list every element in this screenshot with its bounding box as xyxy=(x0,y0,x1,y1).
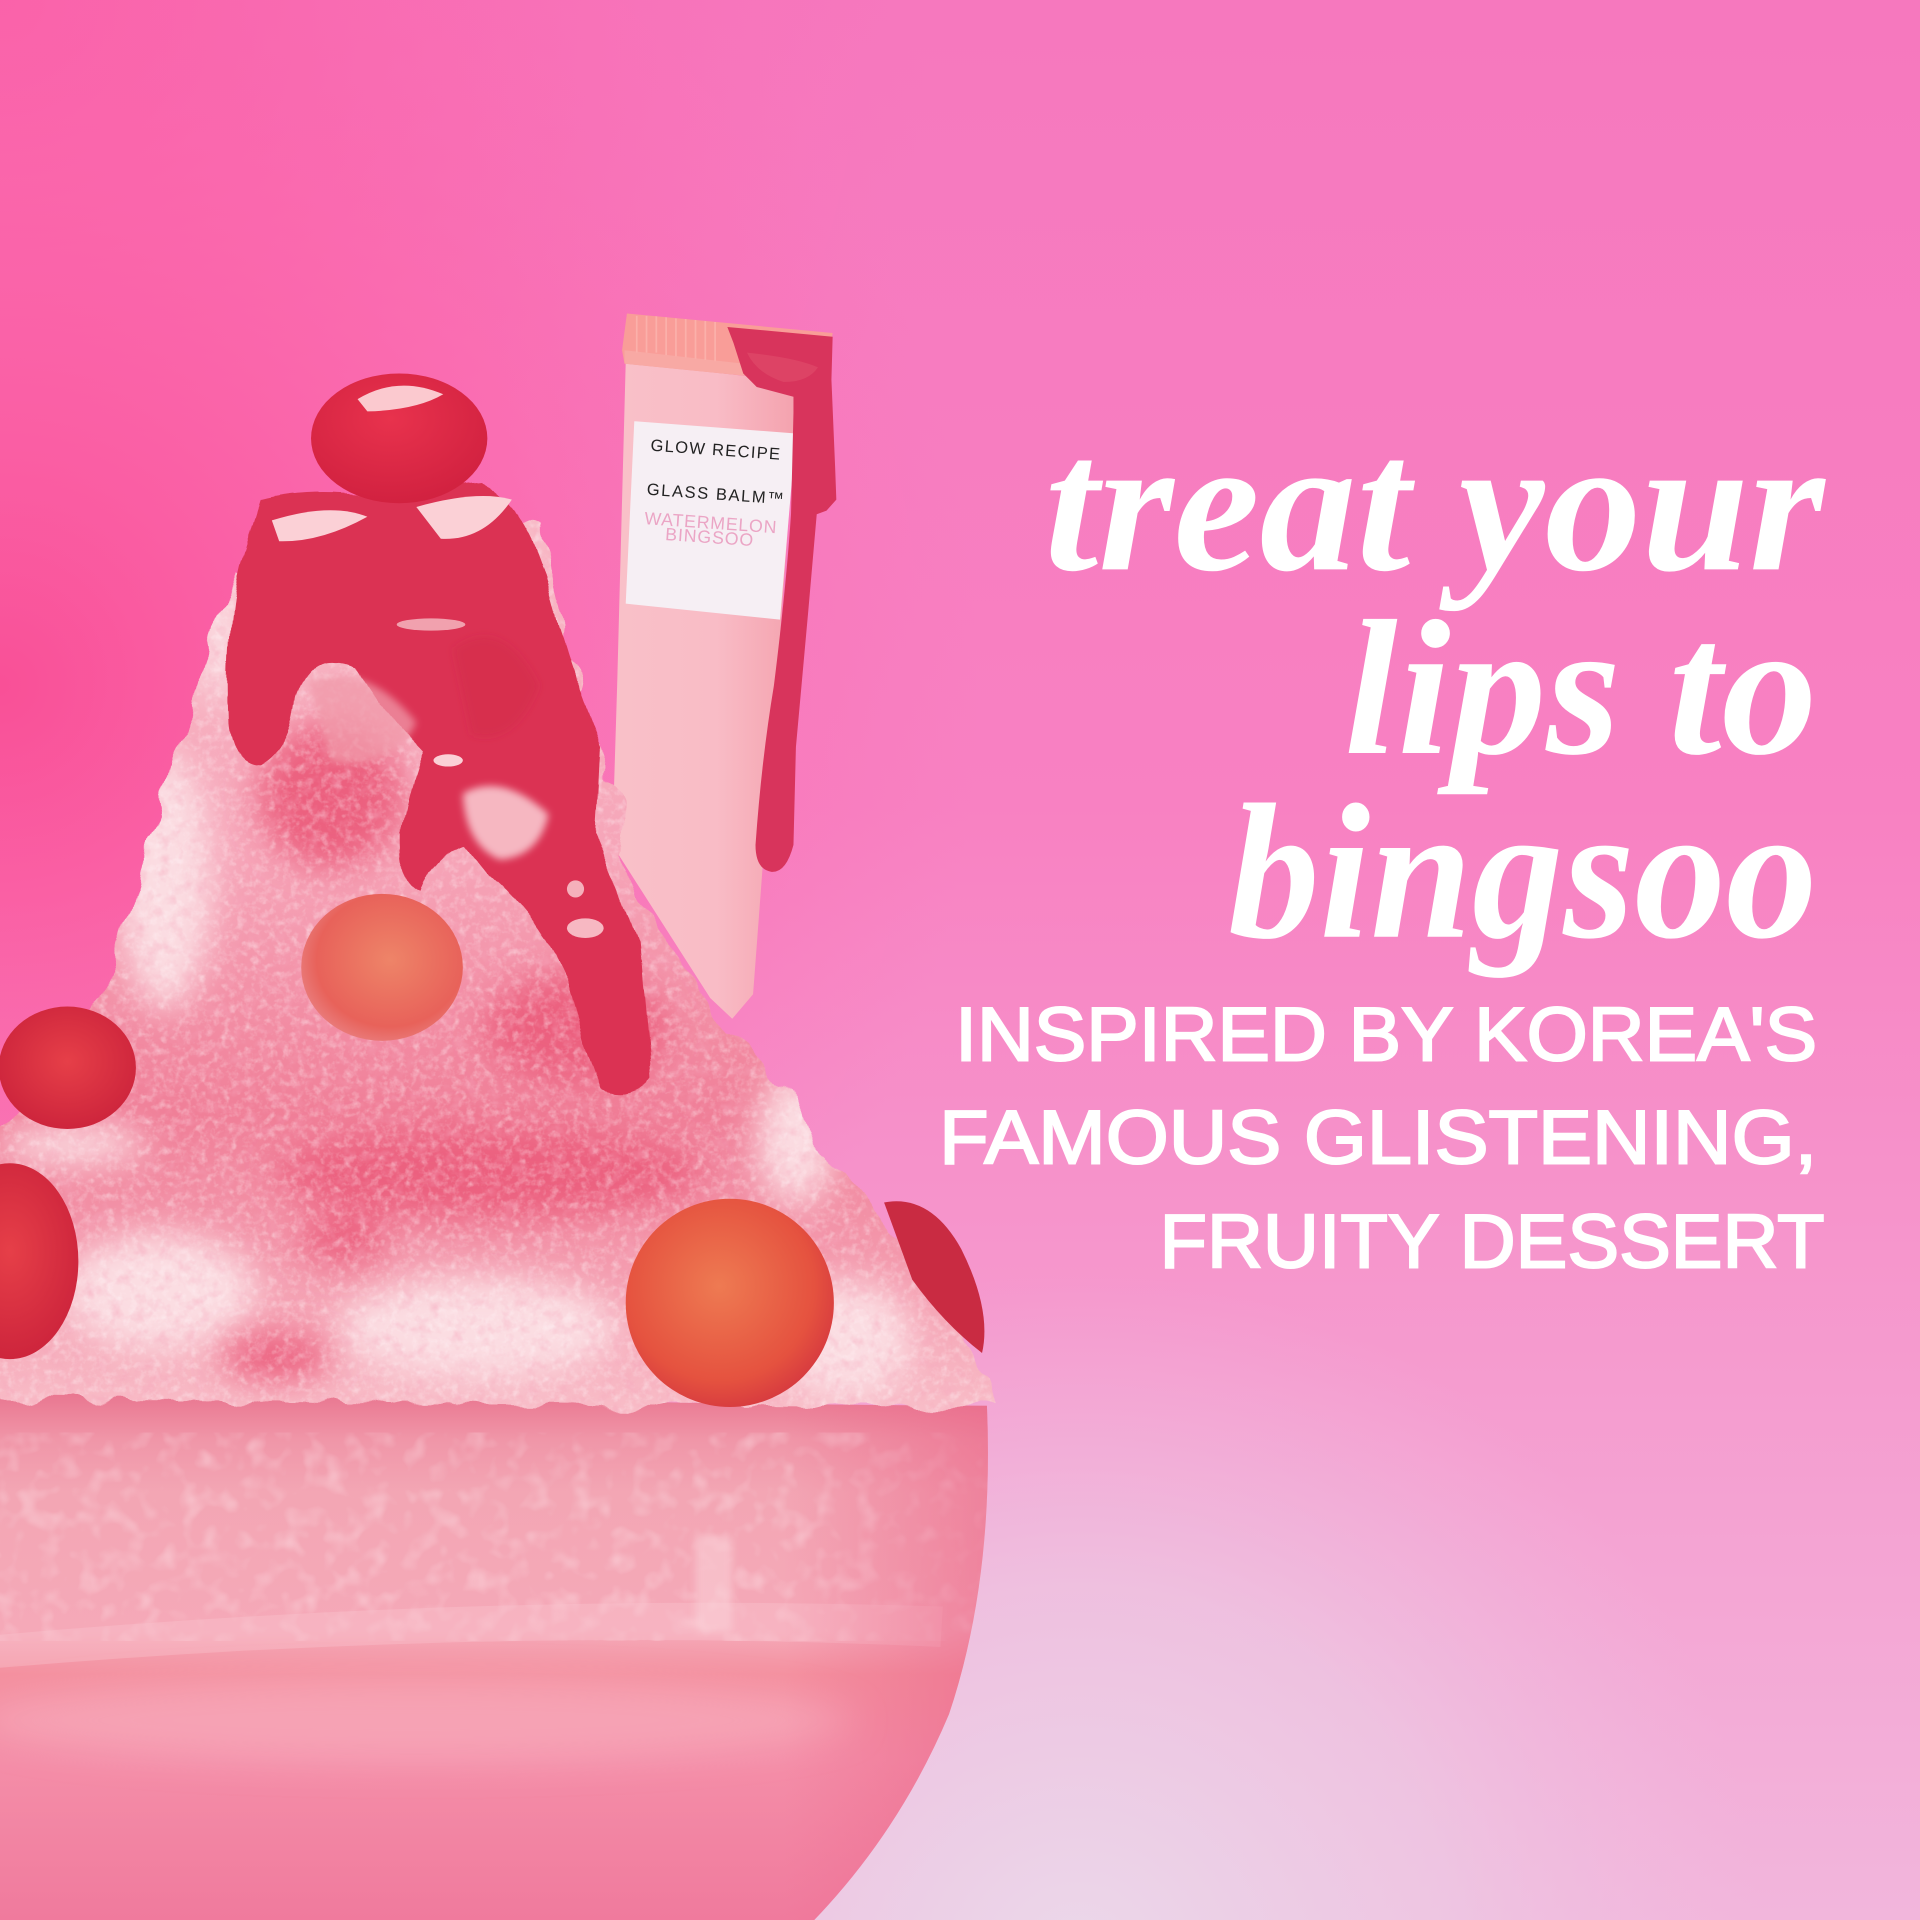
cherry topping xyxy=(311,373,487,503)
watermelon balls xyxy=(0,894,984,1407)
fruit: large front xyxy=(626,1199,834,1407)
product name: GLASS BALM™ xyxy=(646,480,784,508)
subheading: FRUITY DESSERT xyxy=(1160,1199,1824,1284)
heading: treat your xyxy=(1044,397,1826,611)
fruit: upper left xyxy=(0,1007,136,1129)
heading xyxy=(1044,397,1826,979)
sauce gloss highlights xyxy=(272,496,604,938)
heading: lips to xyxy=(1344,581,1817,795)
tube crimped cap xyxy=(622,314,832,376)
product tube xyxy=(612,306,845,1019)
subheading: FAMOUS GLISTENING, xyxy=(939,1095,1817,1180)
subheading: INSPIRED BY KOREA'S xyxy=(955,992,1817,1077)
red balm drip xyxy=(727,327,836,872)
tube body xyxy=(612,362,798,1019)
flavour name: WATERMELON xyxy=(644,508,777,537)
fruit: right xyxy=(884,1201,984,1353)
flavour name second line: BINGSOO xyxy=(665,524,754,550)
fruit: centre top xyxy=(301,894,463,1041)
heading: bingsoo xyxy=(1228,765,1817,979)
pale ice showing through sauce xyxy=(309,637,549,860)
fruit: far left xyxy=(0,1163,78,1359)
pale ice highlights xyxy=(0,569,912,1400)
brand name: GLOW RECIPE xyxy=(650,436,781,464)
bowl xyxy=(0,1378,1004,1920)
deep pink ice syrup xyxy=(220,722,704,1381)
subheading xyxy=(939,992,1824,1284)
shaved ice mound xyxy=(0,520,996,1414)
red sauce xyxy=(228,482,651,1092)
product label xyxy=(626,421,796,620)
